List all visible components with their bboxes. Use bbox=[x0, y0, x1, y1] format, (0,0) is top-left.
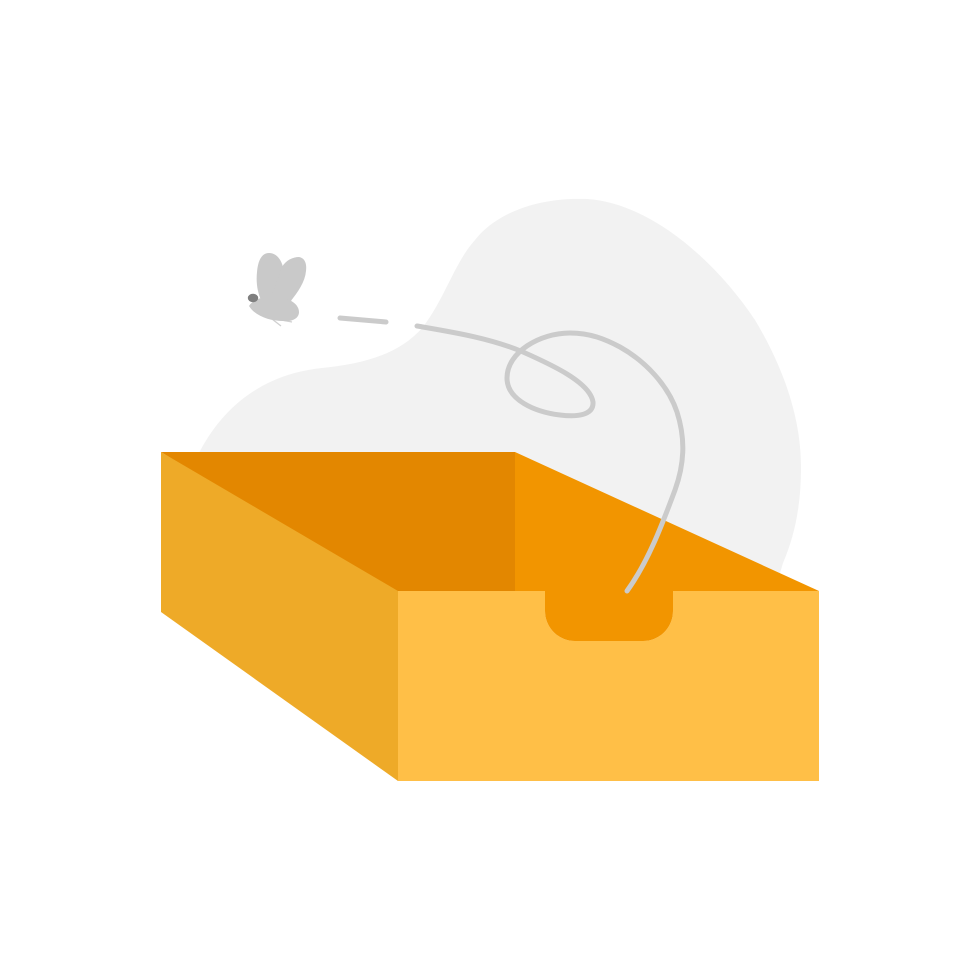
moth upper wing right bbox=[270, 257, 306, 302]
moth antennae bbox=[272, 319, 292, 326]
flight trail bbox=[340, 318, 683, 591]
icon: moth bbox=[248, 253, 306, 326]
box outer: left side bbox=[161, 452, 398, 781]
box notch bbox=[515, 591, 673, 641]
box interior: right wall bbox=[515, 452, 819, 591]
moth head bbox=[248, 294, 258, 302]
moth upper wing left bbox=[257, 253, 292, 304]
moth lower wing bbox=[249, 296, 299, 321]
box interior: back wall bbox=[161, 452, 515, 600]
background blob bbox=[198, 199, 801, 590]
box bbox=[161, 452, 819, 781]
trail loop bbox=[417, 326, 683, 591]
box outer: front with notch bbox=[398, 591, 819, 781]
trail dash bbox=[340, 318, 386, 322]
